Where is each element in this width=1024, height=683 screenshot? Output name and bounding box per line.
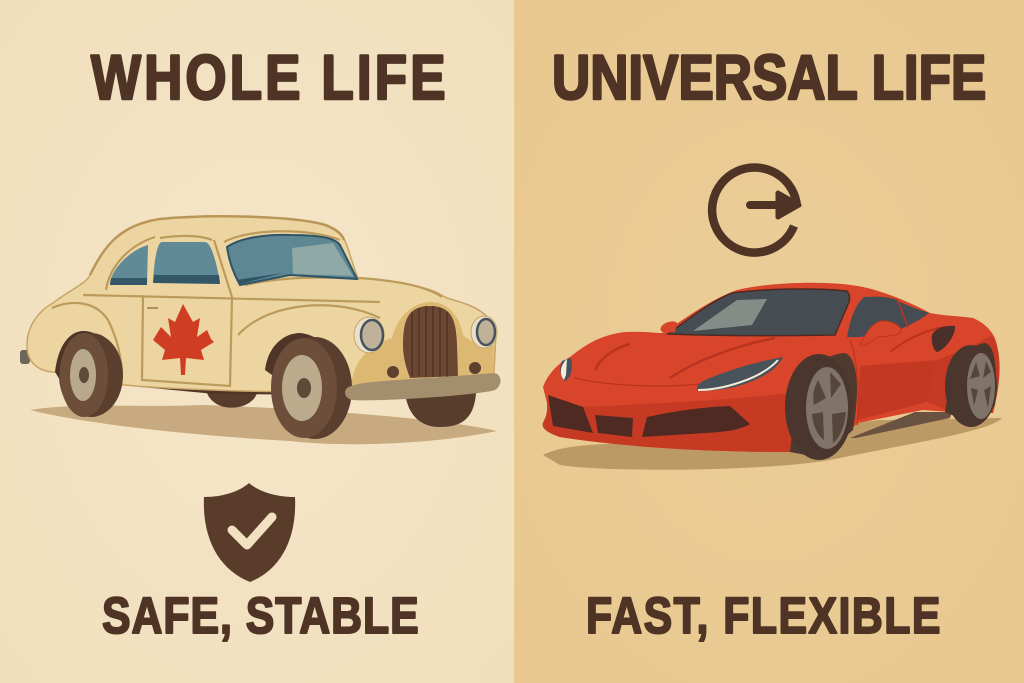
front wheel (265, 333, 352, 439)
underbody strip (120, 380, 345, 395)
heading: whole life: WHOLE LIFE (91, 43, 445, 113)
front wheel (785, 354, 853, 460)
underbody (850, 412, 952, 438)
fender lines (52, 231, 442, 386)
side windows (110, 245, 148, 285)
heading: universal life: UNIVERSAL LIFE (552, 43, 986, 113)
rear bumper tip (20, 350, 30, 364)
small headlight (560, 358, 572, 381)
windscreen (668, 289, 850, 336)
headlight (697, 357, 783, 391)
illustration: red sports car (543, 283, 1002, 470)
side vent (932, 326, 955, 352)
panel: right background (514, 0, 1024, 683)
illustration: classic beige car (20, 216, 501, 444)
far wheels (207, 393, 476, 427)
windscreen reflection (693, 299, 767, 331)
front intakes (548, 395, 750, 437)
maple leaf (153, 304, 214, 375)
car shadow (543, 418, 1002, 470)
left mirror (660, 321, 677, 333)
front nose (347, 302, 494, 390)
side windows (847, 297, 929, 337)
car body (543, 283, 999, 452)
door handle (147, 307, 158, 309)
rear wheel (945, 343, 997, 427)
hood crease lines (574, 327, 945, 425)
panel: left background (0, 0, 514, 683)
label: safe, stable: SAFE, STABLE (102, 586, 419, 644)
car shadow (30, 405, 497, 444)
roof highlight stroke (90, 216, 344, 275)
side mirror (860, 321, 901, 346)
windscreen (227, 235, 357, 285)
icon: circular arrow (712, 168, 799, 253)
bumper (345, 373, 501, 400)
headlights (354, 316, 497, 353)
windscreen reflection (292, 243, 353, 276)
wheel arch (790, 353, 857, 458)
car body (27, 216, 496, 392)
windscreen dash (236, 273, 283, 284)
fog lamps (387, 362, 481, 378)
rear wheel (55, 331, 123, 417)
radiator grille (403, 306, 458, 378)
label: fast, flexible: FAST, FLEXIBLE (586, 586, 940, 644)
lower darker panels (858, 360, 937, 420)
icon: shield with check (204, 483, 295, 582)
